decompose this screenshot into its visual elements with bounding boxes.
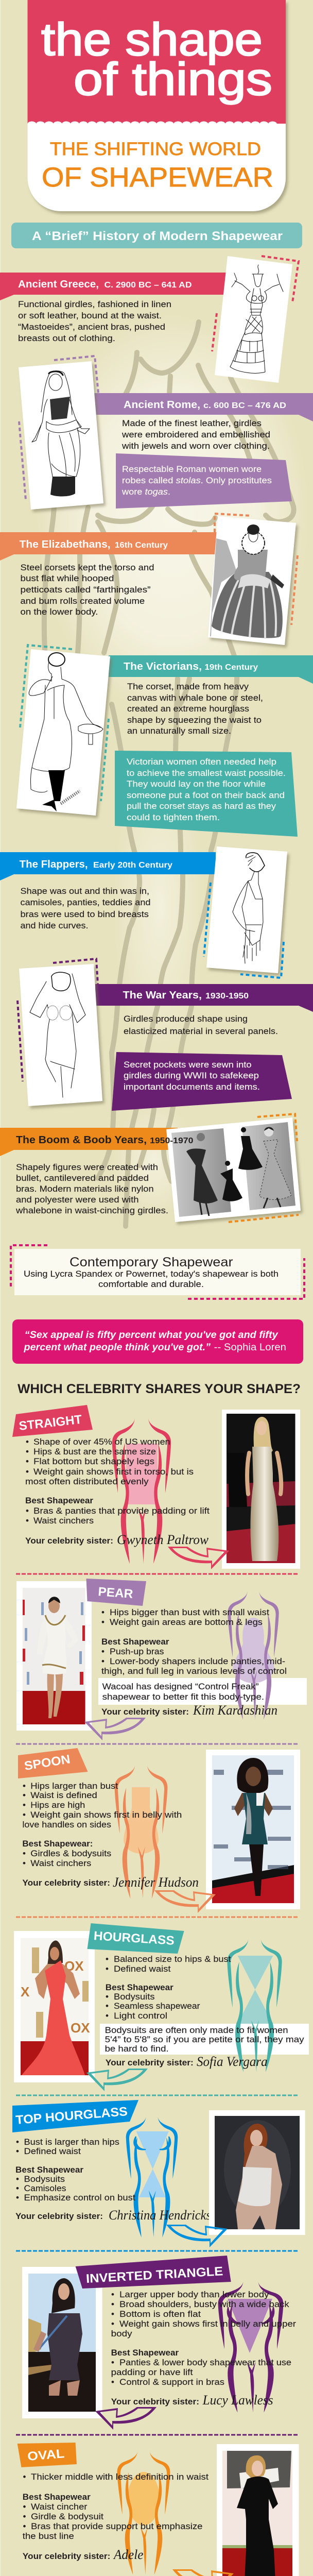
callout: Sophia Loren quote: percent what people think you've got.” bbox=[23, 1342, 211, 1353]
text: top hourglass details: Emphasize control on bust bbox=[24, 2193, 135, 2202]
body figure: straight bbox=[112, 1418, 171, 1564]
text: pear details: Weight gain areas are bottom & legs bbox=[110, 1617, 263, 1627]
photo: Sofia Vergara: X bbox=[21, 1984, 30, 1999]
text: Boom description bbox=[15, 1162, 168, 1215]
body figure: spoon bbox=[115, 1765, 167, 1899]
text: hourglass details: Balanced size to hips & bust bbox=[114, 1954, 231, 1964]
text: Rome description: Made of the finest leather, girdles bbox=[122, 418, 262, 428]
text: Victorian description: canvas with whale bone or steel, bbox=[127, 693, 263, 703]
text: Greece description: breasts out of clothing. bbox=[18, 333, 115, 343]
text: spoon details: • bbox=[23, 1790, 26, 1800]
text: straight details: • bbox=[26, 1447, 29, 1456]
text: hourglass details: Defined waist bbox=[114, 1964, 171, 1974]
text: pear details: • bbox=[101, 1607, 105, 1617]
text: Elizabethan description: and bum rolls created volume bbox=[21, 596, 145, 606]
text: inverted triangle details: Panties & lower body shapewear that use bbox=[119, 2358, 291, 2367]
text: Rome description: were embroidered and embellished bbox=[121, 430, 270, 439]
banner: The Elizabethans: 16th Century bbox=[115, 541, 168, 550]
text: hourglass details bbox=[105, 1954, 304, 2069]
text: inverted triangle details: Your celebrity sister: bbox=[111, 2397, 199, 2406]
text: top hourglass details: Defined waist bbox=[24, 2146, 81, 2156]
text: spoon details: Jennifer Hudson bbox=[113, 1875, 199, 1890]
text: inverted triangle details: Lucy Lawless bbox=[202, 2393, 273, 2408]
panel: Pear bbox=[16, 1579, 307, 1740]
text: Victorian description: The corset, made from heavy bbox=[127, 682, 249, 691]
text: Boom description: Shapely figures were created with bbox=[16, 1162, 158, 1172]
panel: Top Hourglass bbox=[12, 2100, 305, 2247]
text: straight details bbox=[25, 1437, 210, 1547]
text: oval details: • bbox=[23, 2472, 26, 2482]
text: inverted triangle details: Broad shoulders, busty with a wide back bbox=[119, 2299, 289, 2309]
text: hourglass details: • bbox=[106, 1964, 109, 1974]
text: oval details: Waist cincher bbox=[31, 2502, 88, 2512]
arrow: to Gwyneth photo bbox=[168, 1547, 229, 1569]
text: spoon details: Girdles & bodysuits bbox=[30, 1849, 111, 1858]
callout: tightening the corset bbox=[115, 751, 298, 837]
label tag: top hourglass bbox=[12, 2100, 138, 2132]
text: hourglass details: Light control bbox=[114, 2011, 167, 2021]
heading: The Boom & Boob Years: 1950-1970 bbox=[150, 1137, 194, 1145]
text: inverted triangle details: padding or have lift bbox=[111, 2367, 193, 2377]
title bbox=[41, 13, 272, 105]
callout: stolas: Respectable Roman women wore bbox=[122, 464, 262, 474]
text: top hourglass details: Best Shapewear bbox=[15, 2165, 83, 2175]
text: hourglass details: 5'4” to 5'8” so if you are petite or tall, they may bbox=[105, 2035, 304, 2044]
callout: secret pockets bbox=[112, 1052, 292, 1111]
callout: stolas: wore togas. bbox=[121, 487, 170, 497]
text: Greece description: “Mastoeides”, ancient bras, pushed bbox=[18, 322, 165, 332]
text: Greece description bbox=[18, 299, 171, 343]
banner: The Flappers: The Flappers, bbox=[20, 859, 88, 870]
text: top hourglass details: Camisoles bbox=[24, 2183, 66, 2193]
text: straight details: Bras & panties that provide padding or lift bbox=[33, 1506, 210, 1516]
text: spoon details: Waist is defined bbox=[30, 1790, 97, 1800]
banner: The Victorians: The Victorians, bbox=[124, 661, 202, 672]
illustration: Roman woman bbox=[19, 356, 103, 510]
panel: Straight bbox=[12, 1405, 300, 1569]
banner: The War Years: 1930-1950 bbox=[205, 992, 249, 1001]
heading: The Boom & Boob Years bbox=[16, 1134, 194, 1146]
text: straight details: • bbox=[26, 1516, 29, 1526]
text: hourglass details: Seamless shapewear bbox=[114, 2001, 200, 2011]
header card shape bbox=[28, 0, 286, 211]
text: hourglass details: Best Shapewear bbox=[106, 1982, 173, 1992]
heading: which celebrity: WHICH CELEBRITY SHARES YOUR SHAPE? bbox=[18, 1382, 301, 1396]
callout: secret pockets: girdles during WWII to safekeep bbox=[124, 1071, 259, 1080]
text: inverted triangle details: • bbox=[111, 2290, 114, 2299]
text: contemporary description: Using Lycra Spandex or Powernet, today's shapewear is both bbox=[24, 1269, 279, 1279]
label tag: inverted triangle: INVERTED TRIANGLE bbox=[85, 2264, 223, 2286]
banner: The Elizabethans bbox=[0, 532, 218, 561]
banner: The Elizabethans: The Elizabethans, bbox=[20, 539, 111, 550]
text: pear details: Push-up bras bbox=[110, 1647, 164, 1656]
text: Rome description bbox=[121, 418, 270, 451]
text: straight details: Hips & bust are the same size bbox=[33, 1447, 156, 1456]
label tag: pear: PEAR bbox=[98, 1585, 133, 1601]
text: oval details: • bbox=[23, 2502, 26, 2512]
panel: Ancient Rome bbox=[19, 356, 313, 510]
text: oval details: Bras that provide support but emphasize bbox=[31, 2521, 202, 2531]
text: Elizabethan description bbox=[21, 563, 154, 617]
text: contemporary description bbox=[24, 1269, 279, 1289]
subtitle: OF SHAPEWEAR bbox=[42, 162, 273, 193]
text: Elizabethan description: on the lower body. bbox=[21, 607, 98, 617]
callout: tightening the corset: to achieve the smallest waist possible. bbox=[127, 768, 286, 778]
text: straight details: Weight gain shows first in torso, but is bbox=[33, 1467, 194, 1477]
text: War Years description bbox=[124, 1014, 278, 1036]
section banner: brief history bbox=[11, 223, 302, 248]
text: top hourglass details: • bbox=[16, 2146, 19, 2156]
heading: The Boom & Boob Years: The Boom & Boob Years, bbox=[16, 1134, 147, 1146]
illustration: Minoan figure bbox=[212, 256, 299, 383]
text: oval details: • bbox=[23, 2521, 26, 2531]
illustration: Elizabethan gown bbox=[208, 514, 298, 645]
text: pear details: Lower-body shapers include panties, mid- bbox=[110, 1656, 285, 1666]
callout: Sophia Loren quote: -- Sophia Loren bbox=[214, 1342, 286, 1353]
callout: tightening the corset: Victorian women often needed help bbox=[127, 757, 276, 767]
body figure: hourglass bbox=[227, 1939, 282, 2072]
text: spoon details: • bbox=[23, 1810, 26, 1820]
panel: The Flappers bbox=[0, 846, 287, 978]
text: pear details: thigh, and full leg in various levels of control bbox=[101, 1666, 287, 1676]
text: oval details: Girdle & bodysuit bbox=[31, 2512, 103, 2521]
text: pear details: Hips bigger than bust with small waist bbox=[110, 1607, 269, 1617]
panel: Inverted Triangle bbox=[22, 2256, 296, 2430]
banner: Ancient Rome: Ancient Rome, bbox=[124, 399, 200, 411]
text: hourglass details: • bbox=[106, 2011, 109, 2021]
text: hourglass details: Bodysuits are often only made to fit women bbox=[105, 2025, 288, 2035]
panel: The Elizabethans bbox=[0, 514, 298, 645]
label tag: inverted triangle bbox=[76, 2256, 231, 2289]
text: Greece description: Functional girdles, fashioned in linen bbox=[18, 299, 171, 309]
panel: Hourglass bbox=[14, 1923, 309, 2091]
text: Flappers description: Shape was out and thin was in, bbox=[21, 886, 149, 896]
text: spoon details: Your celebrity sister: bbox=[22, 1878, 110, 1888]
text: Victorian description bbox=[127, 682, 263, 736]
banner: Ancient Greece bbox=[0, 273, 229, 300]
callout: secret pockets: Secret pockets were sewn into bbox=[124, 1060, 252, 1070]
text: oval details: Adele bbox=[113, 2547, 143, 2562]
label tag: oval bbox=[18, 2443, 77, 2467]
panel: Contemporary Shapewear bbox=[11, 1245, 304, 1299]
text: straight details: Waist cinchers bbox=[33, 1516, 94, 1526]
text: Boom description: and polyester were used with bbox=[16, 1195, 139, 1205]
text: straight details: Shape of over 45% of US women bbox=[33, 1437, 170, 1447]
arrow: to Sofia photo bbox=[86, 2069, 148, 2091]
text: contemporary description: comfortable and durable. bbox=[98, 1279, 204, 1289]
pink title panel bbox=[28, 0, 286, 124]
text: hourglass details: • bbox=[106, 2001, 109, 2011]
text: top hourglass details: • bbox=[16, 2193, 19, 2202]
banner: The Victorians bbox=[109, 655, 313, 684]
photo: Adele bbox=[217, 2444, 299, 2576]
title: of things bbox=[74, 53, 272, 105]
callout: tightening the corset: someone put a foot on their back and bbox=[127, 790, 285, 800]
text: pear details bbox=[101, 1607, 287, 1718]
label tag: top hourglass: TOP HOURGLASS bbox=[15, 2105, 128, 2127]
header card bbox=[28, 0, 286, 211]
text: Boom description: bras. Modern materials like nylon bbox=[16, 1184, 154, 1194]
illustration: Victorian corset bbox=[16, 645, 110, 816]
arrow: to Christina photo bbox=[166, 2225, 228, 2247]
panel: The Victorians bbox=[16, 645, 313, 837]
callout: tightening the corset: could to tighten them. bbox=[127, 812, 220, 822]
panel: The Boom & Boob Years bbox=[0, 1114, 301, 1222]
text: inverted triangle details: Control & support in bras bbox=[119, 2377, 224, 2387]
text: top hourglass details: Bust is larger than hips bbox=[24, 2137, 119, 2147]
text: Flappers description: bras were used to bind breasts bbox=[21, 909, 149, 919]
text: spoon details: Hips are high bbox=[30, 1800, 85, 1810]
text: hourglass details: Your celebrity sister: bbox=[106, 2058, 194, 2067]
photo: Kim Kardashian bbox=[16, 1581, 92, 1731]
text: inverted triangle details: Weight gain shows first in belly and upper bbox=[119, 2319, 296, 2329]
text: pear details: Wacoal has designed “Control Freak” bbox=[102, 1682, 259, 1691]
banner: The Flappers: Early 20th Century bbox=[93, 861, 172, 870]
callout: stolas: robes called stolas. Only prostitutes bbox=[122, 476, 272, 485]
text: pear details: • bbox=[101, 1617, 105, 1627]
text: spoon details: love handles on sides bbox=[22, 1820, 111, 1829]
text: top hourglass details: • bbox=[16, 2183, 19, 2193]
text: inverted triangle details: • bbox=[111, 2299, 114, 2309]
text: hourglass details: Bodysuits bbox=[114, 1992, 154, 2002]
text: hourglass details: • bbox=[106, 1992, 109, 2002]
text: top hourglass details: • bbox=[16, 2137, 19, 2147]
text: pear details: Best Shapewear bbox=[101, 1637, 169, 1647]
banner: Ancient Rome: c. 600 BC – 476 AD bbox=[203, 401, 286, 410]
panel: The War Years bbox=[18, 959, 313, 1111]
text: oval details: Thicker middle with less definition in waist bbox=[31, 2472, 208, 2482]
text: inverted triangle details: • bbox=[111, 2377, 114, 2387]
text: pear details: shapewear to better fit this body-type. bbox=[102, 1692, 264, 1702]
text: Victorian description: an unnaturally small size. bbox=[127, 726, 231, 736]
label tag: spoon: SPOON bbox=[23, 1752, 71, 1773]
text: spoon details: • bbox=[23, 1800, 26, 1810]
text: oval details: Your celebrity sister: bbox=[23, 2551, 110, 2561]
text: spoon details: Weight gain shows first in belly with bbox=[30, 1810, 182, 1820]
text: inverted triangle details: • bbox=[111, 2319, 114, 2329]
subtitle bbox=[42, 139, 273, 193]
text: top hourglass details: Your celebrity sister: bbox=[15, 2211, 103, 2221]
photo: Sofia Vergara: OX bbox=[71, 2020, 90, 2036]
text: pear details: • bbox=[101, 1647, 105, 1656]
label tag: spoon bbox=[18, 1748, 88, 1778]
text: inverted triangle details: Bottom is often flat bbox=[119, 2309, 201, 2319]
text: Flappers description bbox=[21, 886, 150, 930]
text: inverted triangle details: Larger upper body than lower body bbox=[119, 2290, 269, 2299]
text: Elizabethan description: bust flat while hooped bbox=[21, 573, 114, 583]
callout: Sophia Loren quote: “Sex appeal is fifty percent what you've got and fifty bbox=[25, 1330, 279, 1341]
banner: Ancient Greece: C. 2900 BC – 641 AD bbox=[104, 281, 192, 290]
photo: 1950s dresses bbox=[166, 1114, 301, 1222]
banner bar: The Boom & Boob Years bbox=[0, 1128, 178, 1156]
label tag: straight bbox=[12, 1405, 93, 1437]
arrow: to Adele photo bbox=[172, 2569, 234, 2576]
text: top hourglass details: • bbox=[16, 2174, 19, 2184]
text: Victorian description: shape by squeezing the waist to bbox=[127, 715, 262, 725]
callout: secret pockets: important documents and items. bbox=[124, 1082, 260, 1092]
text: oval details bbox=[23, 2472, 208, 2562]
callout background: bodysuits bbox=[100, 2024, 309, 2055]
arrow: to Lucy photo bbox=[95, 2407, 156, 2430]
text: Elizabethan description: Steel corsets kept the torso and bbox=[21, 563, 154, 572]
text: War Years description: elasticized material in several panels. bbox=[124, 1026, 278, 1036]
callout: tightening the corset: pull the corset stays as hard as they bbox=[127, 801, 276, 811]
illustration: 1940s girdle bbox=[18, 959, 102, 1106]
text: Rome description: with jewels and worn over clothing. bbox=[121, 441, 270, 451]
label tag: oval: OVAL bbox=[27, 2447, 65, 2464]
text: top hourglass details: Bodysuits bbox=[24, 2174, 65, 2184]
text: top hourglass details: Christina Hendricks bbox=[109, 2208, 211, 2223]
banner: The Flappers bbox=[0, 852, 216, 880]
illustration: Flapper slip bbox=[204, 846, 287, 978]
label tag: hourglass bbox=[88, 1923, 184, 1954]
text: spoon details: Best Shapewear: bbox=[22, 1839, 93, 1849]
text: hourglass details: Sofia Vergara bbox=[197, 2054, 268, 2069]
photo: Gwyneth Paltrow bbox=[222, 1410, 300, 1569]
label tag: straight: STRAIGHT bbox=[18, 1413, 83, 1433]
text: spoon details: Hips larger than bust bbox=[30, 1781, 118, 1791]
title: the shape bbox=[41, 13, 263, 65]
text: straight details: • bbox=[26, 1467, 29, 1477]
photo: Sofia Vergara: OX bbox=[64, 1958, 84, 1974]
text: hourglass details: • bbox=[106, 1954, 109, 1964]
photo: Christina Hendricks bbox=[209, 2110, 305, 2235]
text: spoon details: • bbox=[23, 1849, 26, 1858]
photo: Jennifer Hudson bbox=[206, 1750, 300, 1909]
callout: tightening the corset: They would lay on the floor while bbox=[127, 779, 266, 789]
text: top hourglass details bbox=[15, 2137, 211, 2223]
arrow: to Kim photo bbox=[84, 1718, 146, 1740]
text: inverted triangle details: body bbox=[111, 2329, 132, 2338]
text: inverted triangle details: Best Shapewear bbox=[111, 2348, 179, 2358]
label tag: hourglass: HOURGLASS bbox=[93, 1929, 175, 1948]
photo: Lucy Lawless bbox=[22, 2267, 102, 2418]
text: straight details: Flat bottom but shapely legs bbox=[33, 1456, 154, 1466]
text: spoon details bbox=[22, 1781, 199, 1890]
text: Boom description: bullet, cantilevered and padded bbox=[16, 1173, 149, 1183]
section banner: brief history: A “Brief” History of Modern Shapewear bbox=[32, 229, 283, 243]
text: straight details: • bbox=[26, 1506, 29, 1516]
text: Boom description: whalebone in waist-cinching girdles. bbox=[15, 1206, 168, 1215]
body figure: inverted triangle bbox=[218, 2281, 283, 2413]
banner: The War Years bbox=[95, 984, 313, 1012]
heading: Contemporary Shapewear: Contemporary Shapewear bbox=[69, 1255, 233, 1269]
banner: Ancient Greece: Ancient Greece, bbox=[18, 279, 99, 290]
text: Flappers description: camisoles, panties, teddies and bbox=[21, 897, 150, 907]
text: War Years description: Girdles produced shape using bbox=[124, 1014, 248, 1024]
text: Elizabethan description: petticoats called “farthingales” bbox=[21, 585, 151, 595]
body figure: oval bbox=[117, 2451, 170, 2575]
text: inverted triangle details: • bbox=[111, 2309, 114, 2319]
text: straight details: • bbox=[26, 1456, 29, 1466]
text: straight details: Gwyneth Paltrow bbox=[117, 1532, 209, 1547]
label tag: pear bbox=[86, 1579, 146, 1606]
subtitle: THE SHIFTING WORLD bbox=[50, 139, 261, 159]
text: pear details: Your celebrity sister: bbox=[101, 1707, 189, 1717]
text: inverted triangle details bbox=[111, 2290, 296, 2408]
banner: The War Years: The War Years, bbox=[123, 990, 202, 1001]
arrow: to Jennifer photo bbox=[154, 1890, 216, 1913]
text: inverted triangle details: • bbox=[111, 2358, 114, 2367]
text: oval details: the bust line bbox=[23, 2531, 74, 2541]
text: straight details: most often distributed evenly bbox=[25, 1477, 149, 1486]
body figure: top hourglass bbox=[126, 2116, 178, 2238]
panel: Spoon bbox=[18, 1748, 300, 1913]
panel: Oval bbox=[18, 2443, 299, 2576]
text: hourglass details: be hard to find. bbox=[105, 2044, 169, 2054]
text: Greece description: or soft leather, bound at the waist. bbox=[18, 311, 162, 320]
banner: Ancient Rome bbox=[94, 393, 313, 421]
callout background: Wacoal bbox=[98, 1678, 307, 1705]
banner: The Victorians: 19th Century bbox=[205, 663, 258, 672]
body figure: pear bbox=[228, 1591, 279, 1720]
text: Flappers description: and hide curves. bbox=[21, 921, 89, 930]
text: oval details: • bbox=[23, 2512, 26, 2521]
text: spoon details: • bbox=[23, 1781, 26, 1791]
text: spoon details: • bbox=[23, 1858, 26, 1868]
callout: stolas bbox=[116, 453, 292, 509]
text: oval details: Best Shapewear bbox=[23, 2492, 91, 2502]
text: Victorian description: created an extreme hourglass bbox=[127, 704, 249, 714]
text: spoon details: Waist cinchers bbox=[30, 1858, 91, 1868]
photo: Sofia Vergara bbox=[14, 1931, 95, 2082]
text: straight details: Best Shapewear bbox=[25, 1496, 93, 1505]
callout: Sophia Loren quote bbox=[12, 1319, 303, 1364]
text: pear details: • bbox=[101, 1656, 105, 1666]
panel: Ancient Greece bbox=[0, 256, 299, 383]
text: straight details: Your celebrity sister: bbox=[25, 1536, 113, 1546]
text: pear details: Kim Kardashian bbox=[193, 1703, 277, 1718]
text: straight details: • bbox=[26, 1437, 29, 1447]
background body silhouette bbox=[36, 314, 309, 1226]
